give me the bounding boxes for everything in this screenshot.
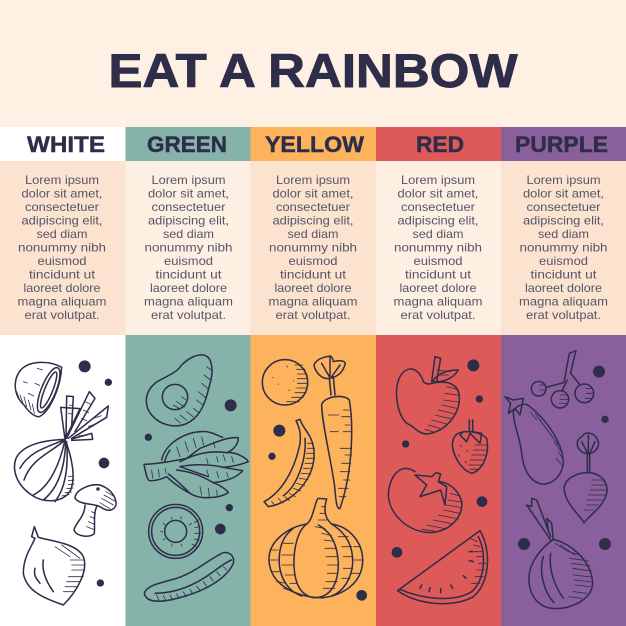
- heading: purple: PURPLE: [515, 132, 608, 157]
- text block: yellow: magna aliquam: [268, 294, 358, 308]
- icon: eggplant: [505, 397, 563, 484]
- text block: red: nonummy nibh: [394, 240, 482, 254]
- text block: yellow: nonummy nibh: [269, 240, 357, 254]
- heading: green: GREEN: [147, 132, 227, 157]
- decorative dots: white and green: [79, 360, 237, 587]
- text block: purple: erat volutpat.: [526, 308, 601, 322]
- icon: coconut: [15, 362, 64, 417]
- text block: red: erat volutpat.: [400, 308, 476, 322]
- text block: yellow: sed diam: [288, 227, 338, 241]
- heading: white: WHITE: [27, 132, 105, 157]
- text block: white: magna aliquam: [18, 294, 106, 308]
- text block: white: tincidunt ut: [29, 268, 96, 282]
- panel: white: [0, 127, 126, 626]
- heading: red: RED: [416, 132, 464, 157]
- text block: green: laoreet dolore: [150, 281, 227, 295]
- text block: yellow: [268, 173, 358, 322]
- text block: green: Lorem ipsum: [152, 173, 226, 187]
- text block: green: euismod: [164, 254, 213, 268]
- text block: purple: nonummy nibh: [520, 240, 608, 254]
- text block: white: [18, 173, 106, 322]
- text block: yellow: euismod: [288, 254, 338, 268]
- decorative dots: purple: [518, 366, 611, 550]
- text block: yellow: laoreet dolore: [274, 281, 352, 295]
- text block: yellow: dolor sit amet,: [272, 186, 354, 200]
- text block: purple: [519, 173, 608, 322]
- icon: mushroom: [74, 485, 116, 536]
- icon: leafy greens: [144, 432, 248, 498]
- text block: green: sed diam: [163, 227, 214, 241]
- text block: green: dolor sit amet,: [148, 186, 229, 200]
- heading: yellow: YELLOW: [265, 132, 365, 157]
- text block: green: magna aliquam: [144, 294, 233, 308]
- text block: yellow: Lorem ipsum: [276, 173, 350, 187]
- icon: carrot: [314, 356, 352, 509]
- text block: green: tincidunt ut: [156, 268, 222, 282]
- text block: green: [144, 173, 233, 322]
- text block: yellow: adipiscing elit,: [272, 214, 354, 228]
- text block: purple: consectetuer: [526, 200, 600, 214]
- text block: purple: Lorem ipsum: [526, 173, 601, 187]
- text block: red: magna aliquam: [394, 294, 482, 308]
- text block: green: erat volutpat.: [151, 308, 226, 322]
- panel: purple: [501, 127, 626, 626]
- text block: white: adipiscing elit,: [22, 214, 103, 228]
- title: EAT A RAINBOW: [108, 45, 518, 98]
- text block: red: consectetuer: [401, 200, 475, 214]
- title banner: [0, 0, 626, 127]
- text block: purple: adipiscing elit,: [523, 214, 604, 228]
- icon: strawberry: [452, 420, 488, 473]
- panel: yellow: [250, 127, 376, 626]
- text block: yellow: consectetuer: [276, 200, 350, 214]
- panel: green: [126, 127, 250, 626]
- icon: orange: [262, 360, 308, 405]
- icon: kiwi slice: [149, 504, 203, 558]
- text block: white: sed diam: [36, 227, 88, 241]
- text block: red: adipiscing elit,: [398, 214, 478, 228]
- text block: red: dolor sit amet,: [398, 186, 478, 200]
- text block: purple: magna aliquam: [519, 294, 608, 308]
- illustrations: yellow and red columns: [262, 356, 488, 604]
- text block: red: euismod: [414, 254, 462, 268]
- text block: white: nonummy nibh: [18, 240, 106, 254]
- text block: white: laoreet dolore: [24, 281, 101, 295]
- text block: red: tincidunt ut: [405, 268, 472, 282]
- text block: red: sed diam: [412, 227, 464, 241]
- text block: purple: dolor sit amet,: [523, 186, 604, 200]
- text block: purple: tincidunt ut: [530, 268, 597, 282]
- icon: apple: [397, 357, 459, 434]
- icon: cherries: [531, 351, 594, 408]
- decorative dots: yellow and red: [268, 359, 487, 601]
- text block: green: consectetuer: [152, 200, 226, 214]
- text block: green: nonummy nibh: [144, 240, 232, 254]
- text block: green: adipiscing elit,: [148, 214, 229, 228]
- icon: pumpkin: [269, 498, 363, 598]
- icon: purple onion: [527, 498, 593, 609]
- icon: onion: [23, 527, 85, 605]
- icon: tomato: [388, 468, 462, 533]
- icon: watermelon: [398, 531, 488, 604]
- text block: red: [394, 173, 482, 322]
- text block: purple: laoreet dolore: [525, 281, 602, 295]
- icon: beet: [564, 433, 607, 523]
- icon: avocado: [146, 355, 212, 426]
- text block: yellow: erat volutpat.: [276, 308, 350, 322]
- text block: white: erat volutpat.: [24, 308, 100, 322]
- text block: white: Lorem ipsum: [25, 173, 99, 187]
- text block: purple: sed diam: [538, 227, 589, 241]
- text block: purple: euismod: [539, 254, 588, 268]
- text block: yellow: tincidunt ut: [280, 268, 347, 282]
- text block: white: euismod: [38, 254, 86, 268]
- illustrations: purple column: [505, 351, 611, 609]
- text block: red: Lorem ipsum: [401, 173, 475, 187]
- text block: white: dolor sit amet,: [22, 186, 103, 200]
- illustrations: white and green columns: [14, 355, 248, 605]
- icon: spring onion: [14, 392, 108, 502]
- icon: banana: [264, 419, 315, 507]
- text block: red: laoreet dolore: [400, 281, 477, 295]
- panel: red: [376, 127, 501, 626]
- text block: white: consectetuer: [25, 200, 99, 214]
- icon: cucumber: [144, 553, 234, 601]
